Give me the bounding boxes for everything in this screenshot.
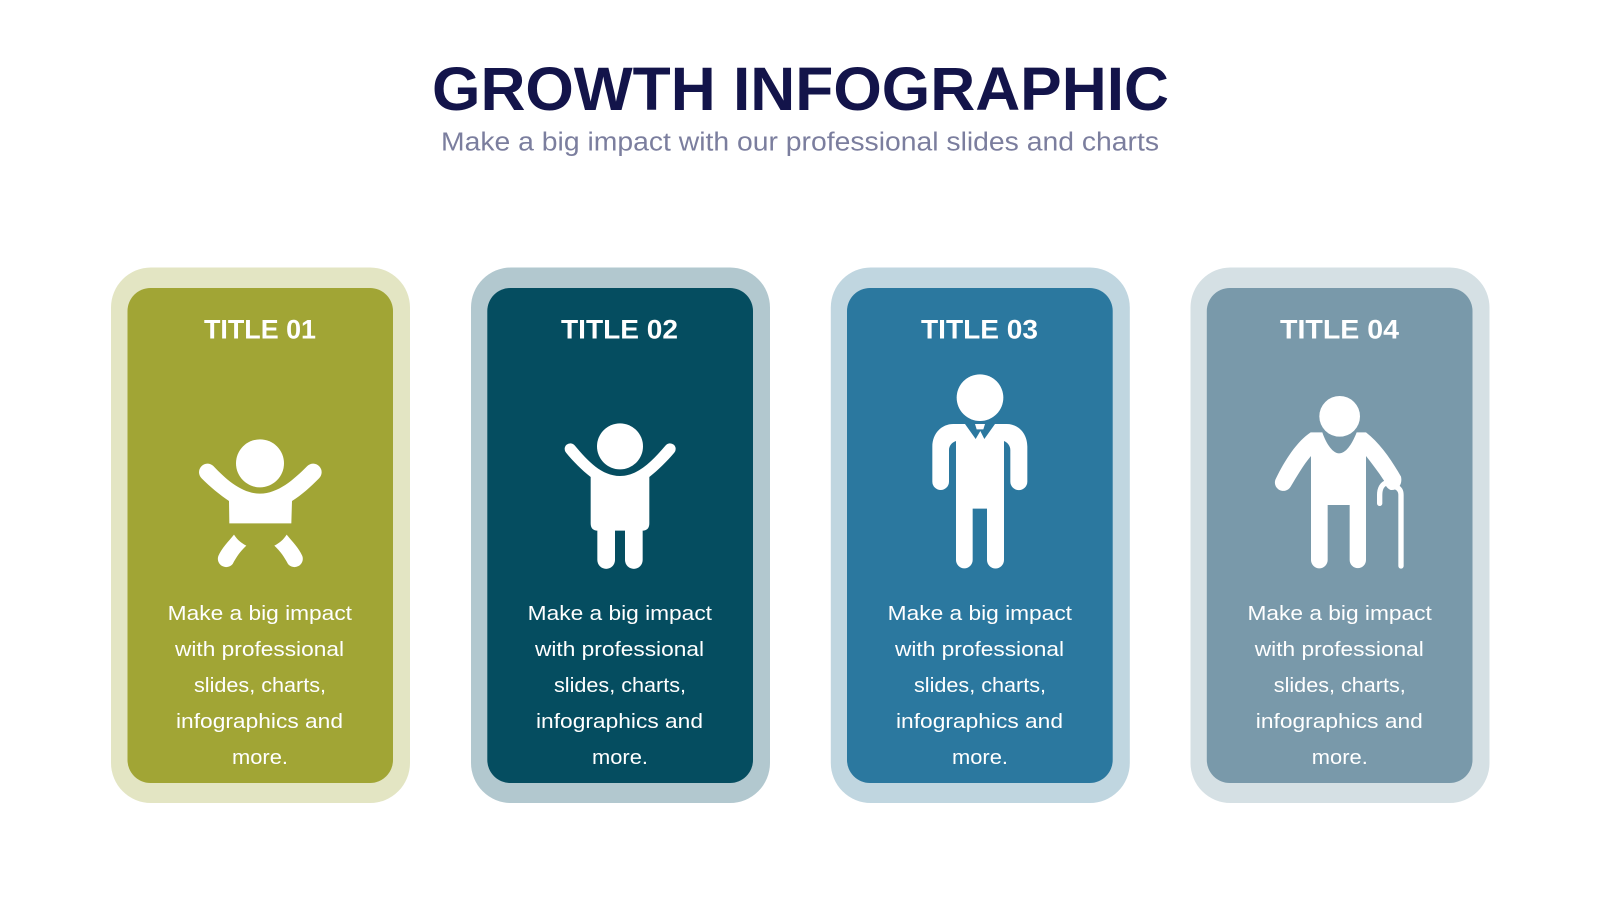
card frame 01: [111, 268, 410, 803]
icon: child: [565, 423, 676, 569]
card fill 04: [1207, 288, 1472, 783]
panel: title 02: [471, 268, 770, 803]
card text 04: more.: [1312, 746, 1368, 769]
card text 03: infographics and: [896, 710, 1063, 733]
card text 04: slides, charts,: [1274, 674, 1406, 697]
card fill 03: [847, 288, 1113, 783]
card text 03: Make a big impact: [888, 602, 1072, 625]
panel: title 01: [111, 268, 410, 803]
card text 02: more.: [592, 746, 648, 769]
card heading 01: TITLE 01: [204, 314, 316, 344]
card text 03: with professional: [894, 638, 1064, 661]
card text 03: slides, charts,: [914, 674, 1046, 697]
panel: title 04: [1190, 268, 1490, 803]
card text 01: Make a big impact: [168, 602, 352, 625]
title: GROWTH INFOGRAPHIC: [432, 55, 1169, 123]
card heading 02: TITLE 02: [561, 314, 678, 344]
card text 02: [528, 602, 712, 769]
card text 02: Make a big impact: [528, 602, 712, 625]
card text 04: with professional: [1254, 638, 1424, 661]
card text 02: with professional: [534, 638, 704, 661]
card frame 02: [471, 268, 770, 803]
card text 02: infographics and: [536, 710, 703, 733]
card text 01: infographics and: [176, 710, 343, 733]
card fill 02: [487, 288, 753, 783]
panel: title 03: [831, 268, 1130, 803]
card heading 03: TITLE 03: [921, 314, 1038, 344]
card text 03: more.: [952, 746, 1008, 769]
card text 01: more.: [232, 746, 288, 769]
card text 03: [888, 602, 1072, 769]
icon: baby: [199, 439, 322, 567]
card text 04: Make a big impact: [1248, 602, 1432, 625]
card text 02: slides, charts,: [554, 674, 686, 697]
card frame 03: [831, 268, 1130, 803]
card heading 04: TITLE 04: [1280, 314, 1399, 344]
subtitle: Make a big impact with our professional slides and charts: [441, 128, 1159, 156]
icon: elder with cane: [1275, 396, 1401, 568]
card text 04: [1248, 602, 1432, 769]
card fill 01: [128, 288, 393, 783]
card text 01: with professional: [174, 638, 344, 661]
card text 01: [168, 602, 352, 769]
icon: adult: [932, 374, 1027, 568]
card text 01: slides, charts,: [194, 674, 326, 697]
card frame 04: [1190, 268, 1490, 803]
card text 04: infographics and: [1256, 710, 1423, 733]
